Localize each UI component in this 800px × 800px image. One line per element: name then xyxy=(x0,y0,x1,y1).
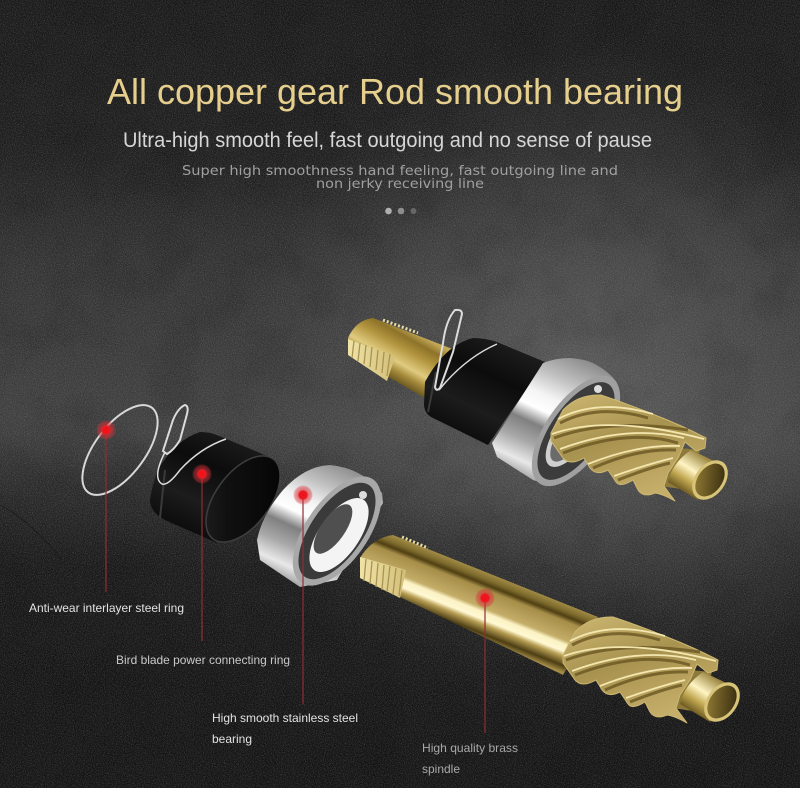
anti-wear steel ring xyxy=(68,393,172,507)
description text: non jerky receiving line xyxy=(316,176,484,192)
callout: brass spindle xyxy=(422,588,518,776)
exploded parts xyxy=(68,393,399,600)
description text: Super high smoothness hand feeling, fast outgoing line and xyxy=(182,163,618,179)
pagination dots xyxy=(385,208,416,214)
callout: steel ring: Anti-wear interlayer steel ring xyxy=(29,601,184,615)
callout: bearing: High smooth stainless steel xyxy=(212,711,358,725)
lower clip wire xyxy=(158,405,226,484)
assembled spindle with bearing xyxy=(348,310,735,507)
callout: connecting ring xyxy=(116,464,290,667)
spindle helical gear xyxy=(563,617,718,723)
upper black ring xyxy=(424,338,545,445)
spindle tube end xyxy=(680,672,747,729)
subtitle: Ultra-high smooth feel, fast outgoing and no sense of pause xyxy=(123,129,652,152)
lower black connecting ring xyxy=(150,432,295,555)
callout: connecting ring: Bird blade power connecting ring xyxy=(116,653,290,667)
callout: bearing: bearing xyxy=(212,732,252,746)
callout: brass spindle: High quality brass xyxy=(422,741,518,755)
callout: brass spindle: spindle xyxy=(422,762,460,776)
callout: bearing xyxy=(212,485,358,746)
long brass spindle xyxy=(360,535,747,729)
title: All copper gear Rod smooth bearing xyxy=(107,71,683,112)
upper steel bearing xyxy=(492,358,637,501)
upper clip wire xyxy=(435,310,497,390)
upper helical gear xyxy=(551,395,706,501)
description text xyxy=(182,163,618,192)
lower steel bearing xyxy=(257,462,399,600)
spindle shaft xyxy=(360,535,598,675)
upper brass rod xyxy=(348,318,455,398)
upper tube end xyxy=(668,450,735,507)
callout: steel ring xyxy=(29,420,184,615)
